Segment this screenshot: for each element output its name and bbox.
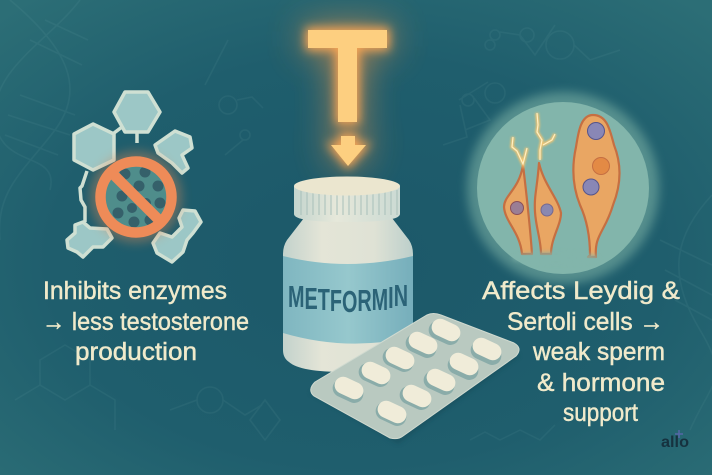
left caption: → less testosterone (42, 308, 249, 336)
logo: allo (661, 434, 689, 451)
glow behind the inhibited enzyme (90, 151, 182, 243)
left caption: production (75, 338, 197, 366)
right caption: support (563, 399, 638, 427)
cell middle (535, 163, 561, 254)
left caption: Inhibits enzymes (43, 277, 227, 305)
right caption: Sertoli cells → (507, 308, 664, 336)
enzyme hexagons (67, 92, 201, 262)
cell right (573, 115, 620, 257)
disc (477, 102, 649, 274)
bottle cap (294, 176, 400, 222)
down arrow (331, 136, 366, 166)
wide glow (308, 30, 387, 166)
panel: Leydig and Sertoli cells (467, 92, 659, 284)
fade at cell bases (512, 252, 600, 264)
metformin bottle (283, 176, 413, 372)
left caption (42, 277, 249, 366)
blocked enzyme core (103, 164, 169, 230)
glow around disc (467, 92, 659, 284)
lightning sparks glow (512, 113, 555, 164)
bottle label (283, 256, 413, 344)
right caption: & hormone (537, 369, 665, 397)
prohibition sign (100, 162, 172, 232)
right caption: weak sperm (532, 338, 665, 366)
lightning sparks (512, 113, 555, 164)
bottle body (283, 218, 413, 372)
right caption: Affects Leydig & (482, 277, 680, 305)
label text: METFORMIN (288, 278, 408, 319)
glowing testosterone T with arrow (308, 30, 387, 166)
blister sheet (311, 314, 519, 439)
pills (330, 316, 504, 429)
blister shadow (310, 316, 520, 444)
right caption (482, 277, 680, 427)
cell left (504, 165, 532, 254)
blister pack (310, 314, 520, 444)
letter T (308, 30, 387, 122)
panel: enzyme inhibition icon (67, 92, 201, 262)
inner glow (308, 30, 387, 166)
